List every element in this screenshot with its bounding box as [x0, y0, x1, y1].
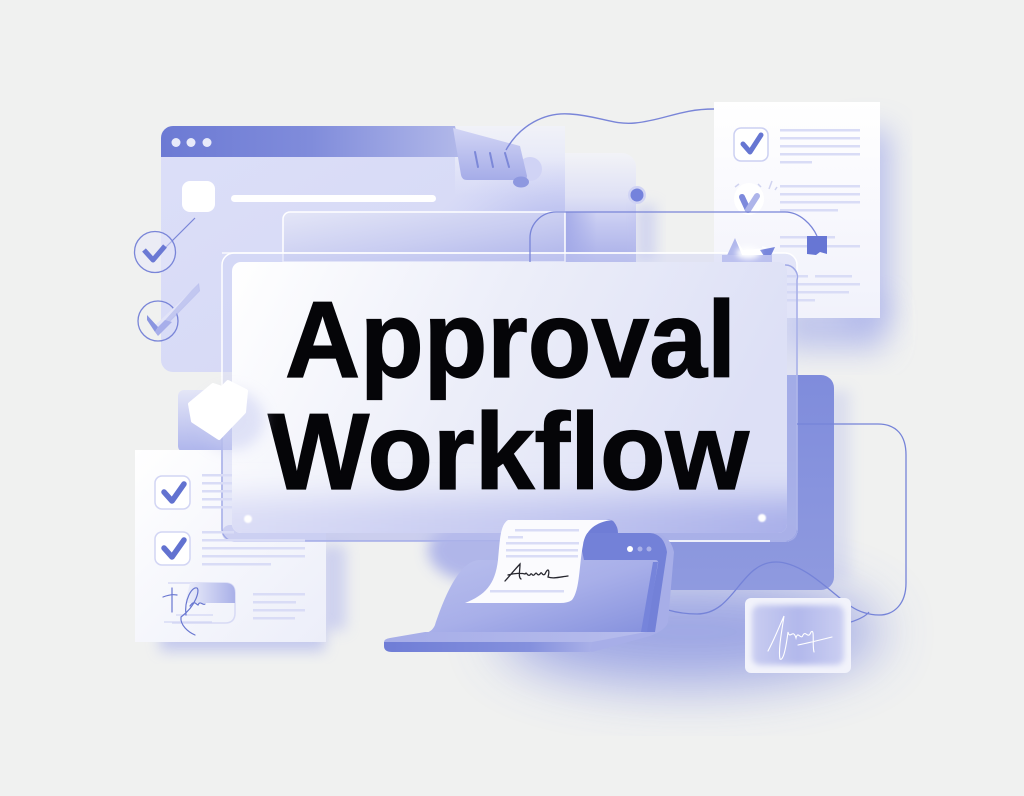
address line: [231, 195, 436, 202]
checkbox: checked: [734, 128, 768, 161]
connector: laptop to signature card: [851, 612, 869, 622]
panel: left blue square: [178, 390, 238, 452]
panel: lower right blue block: [560, 375, 834, 590]
text lines: [202, 474, 305, 620]
icon: hand tab: [453, 128, 542, 188]
bottom-left document content: [155, 474, 305, 635]
laptop: [384, 520, 674, 652]
panel: top-right document: [714, 102, 880, 318]
icon: checkmark circle one: [134, 218, 195, 272]
title: Approval: [285, 279, 736, 401]
signature card: [164, 583, 235, 623]
panel: back browser window: [161, 126, 565, 372]
panel: bottom-left document: [135, 450, 326, 642]
card sparkles: [244, 514, 766, 523]
checkbox: first: [155, 476, 190, 509]
window right fade: [455, 126, 565, 196]
signature card: [745, 598, 851, 673]
soft glow shadows: [160, 130, 890, 684]
signature: [163, 588, 205, 635]
laptop back shell: [560, 533, 674, 652]
laptop tray: [425, 560, 658, 633]
icon: burst check: [734, 181, 777, 215]
panel: main title card: [232, 262, 787, 533]
white signature: [768, 616, 832, 659]
title: [268, 279, 749, 513]
laptop lights: [627, 546, 652, 552]
browser window dots: [172, 138, 212, 147]
connector: curve to top-right document: [506, 109, 714, 150]
connector: rounded line to node: [530, 212, 817, 262]
laptop: shadow behind: [428, 518, 528, 582]
browser header bar: [161, 126, 462, 157]
icon: star burst behind card: [722, 238, 775, 262]
avatar tile: [182, 181, 215, 212]
window right blue corner: [420, 160, 565, 262]
icon: bookmark node: [807, 236, 827, 255]
icon: connector node dot: [628, 186, 646, 204]
checkbox: second: [155, 532, 190, 565]
connector: right loop: [668, 424, 906, 615]
icon: checkmark circle two: [138, 283, 200, 341]
panel: main glass card frame: [222, 253, 797, 541]
paper curl tab: [585, 520, 618, 538]
paper with signature: [465, 520, 612, 603]
text lines: [780, 129, 860, 302]
laptop inner edge: [641, 562, 658, 632]
title: Workflow: [268, 391, 749, 513]
laptop dark lid: [578, 533, 667, 632]
icon: white hand puzzle: [190, 382, 264, 450]
panel: glass frame behind main card: [283, 212, 565, 262]
panel: side tab beside window: [565, 153, 656, 262]
